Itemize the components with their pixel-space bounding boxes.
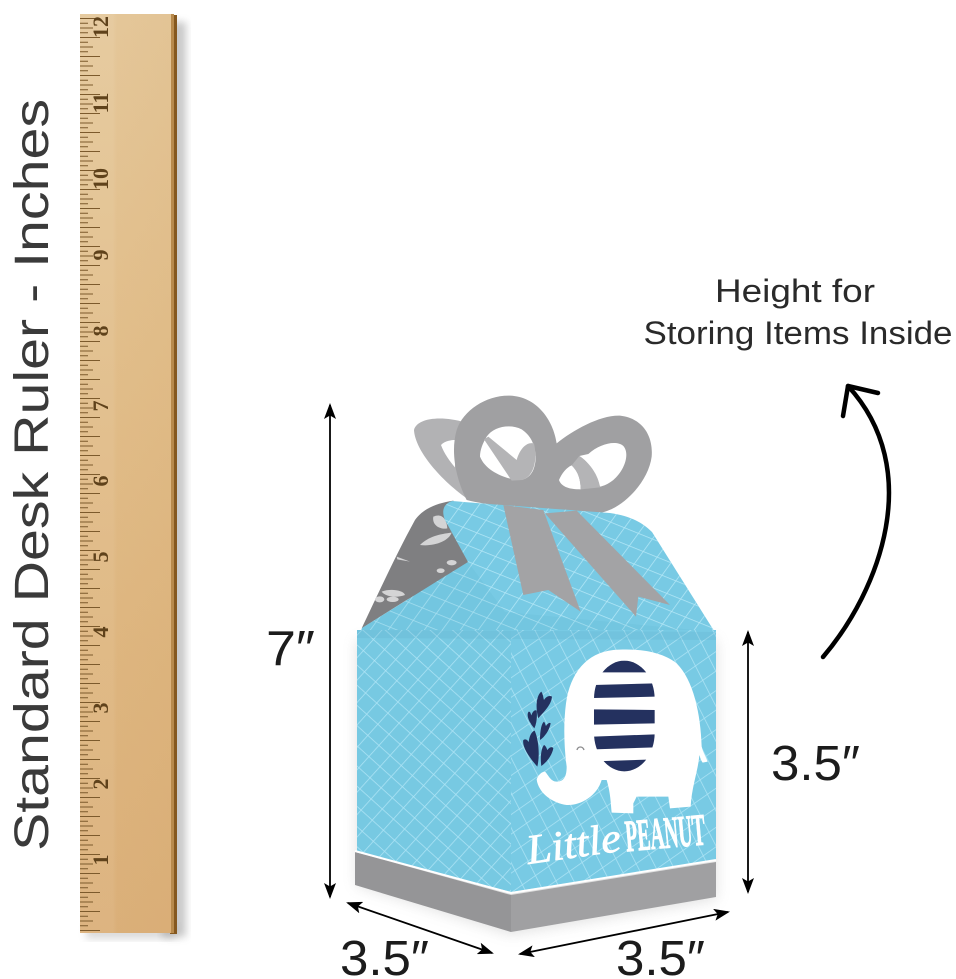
callout: height for storing items inside [644,273,952,351]
right front panel [511,630,716,892]
ruler numbers: 3 [88,702,113,714]
heading: standard desk ruler - inches: Standard Desk Ruler - Inches [6,99,59,851]
dimension arrow: total height [329,405,331,897]
box shadow [357,640,716,934]
bow [414,396,652,513]
dimension label: 3.5 inches height: 3.5″ [771,737,860,791]
ruler numbers: 9 [88,250,113,260]
text: PEANUT [623,805,707,861]
little peanut logo [522,805,707,874]
ruler numbers: 12 [88,16,113,38]
dimension label: 7 inches: 7″ [266,622,315,676]
callout: height for storing items inside: Storing Items Inside [644,315,952,351]
elephant graphic [522,649,708,874]
hearts [523,692,553,767]
dimension arrow: right width [520,912,728,954]
roof: grey reverse side [362,501,480,628]
grey base band [355,851,716,932]
floral pattern [375,515,457,602]
ruler numbers [88,16,113,866]
dimension arrow: left width [348,903,492,953]
little peanut logo: Little [522,815,624,874]
left front panel [357,630,511,892]
wooden ruler [80,14,186,939]
ruler numbers: 6 [88,476,113,486]
ruler numbers: 11 [88,93,113,113]
roof: blue front flap [357,501,716,642]
gift box [355,396,716,934]
ruler numbers: 7 [88,400,113,412]
curved arrow [823,386,889,657]
ruler numbers: 4 [88,626,113,638]
inner bow strips [484,437,535,481]
elephant body [537,649,708,813]
ruler numbers: 5 [88,552,113,562]
middle and right loops [454,396,652,513]
ruler numbers: 10 [88,168,113,190]
ruler tick marks [80,18,110,931]
elephant stripes [593,661,655,773]
ruler numbers: 1 [88,854,113,866]
ribbon tails [503,505,670,617]
elephant eye [577,747,584,750]
left loop [414,418,480,501]
dimension arrow: storage height [747,632,749,892]
ruler numbers: 8 [88,326,113,336]
fold crease shading [357,630,716,640]
callout: height for storing items inside: Height for [715,273,875,309]
ruler numbers: 2 [88,778,113,790]
